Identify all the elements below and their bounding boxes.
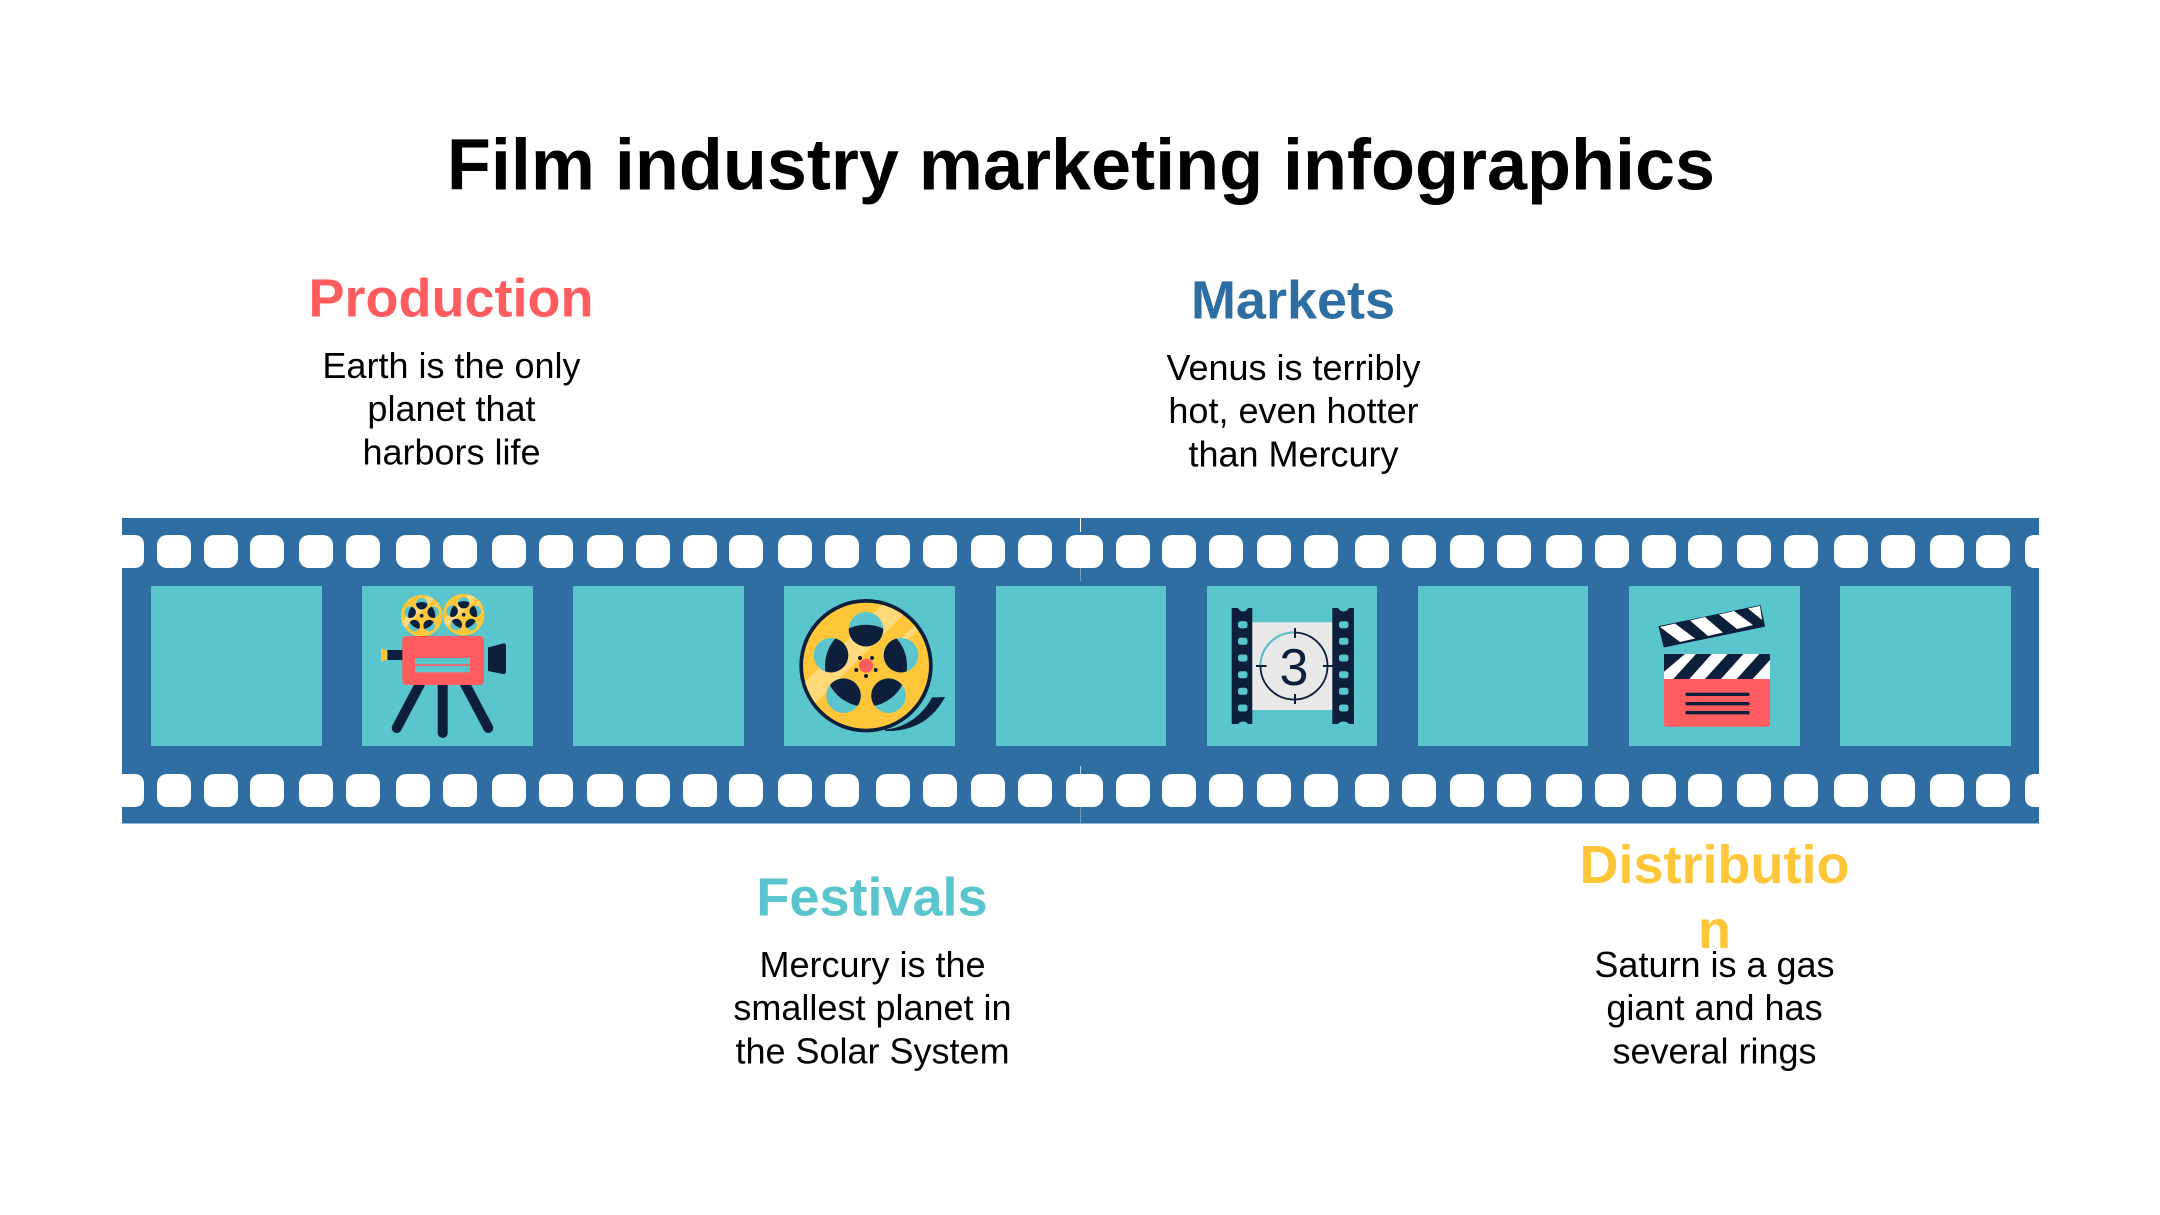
projector slot xyxy=(415,658,470,672)
clapper body xyxy=(1664,679,1770,727)
heading: Production: Production xyxy=(309,268,593,328)
icon: film countdown xyxy=(1232,608,1354,724)
description: Production: harbors life xyxy=(362,431,541,472)
description: Markets: Venus is terribly xyxy=(1166,347,1421,388)
clapper stripes xyxy=(1664,654,1770,679)
projector lens xyxy=(381,643,506,674)
description: Festivals: Mercury is the xyxy=(759,944,986,985)
clapper arm xyxy=(1659,606,1764,647)
icon: clapperboard xyxy=(1659,606,1770,727)
description: Distribution: giant and has xyxy=(1606,987,1823,1028)
sprocket holes: top row xyxy=(122,535,2039,568)
film tail xyxy=(885,697,945,731)
projector reels xyxy=(392,577,490,641)
reel xyxy=(776,551,946,742)
projector body xyxy=(402,636,484,685)
description: Production: Earth is the only xyxy=(322,345,581,386)
icon: movie projector xyxy=(381,577,506,733)
countdown dial xyxy=(1256,628,1334,704)
description: Production: planet that xyxy=(367,388,536,429)
projector legs xyxy=(397,684,488,733)
description: Festivals: smallest planet in xyxy=(733,987,1012,1028)
description: Festivals: the Solar System xyxy=(735,1030,1010,1071)
text block: Production xyxy=(309,268,593,472)
film strip xyxy=(122,518,2039,824)
description: Distribution: Saturn is a gas xyxy=(1594,944,1835,985)
heading: Distribution: Distributio xyxy=(1580,835,1849,895)
text block: Distribution xyxy=(1580,835,1849,1071)
countdown number: 3 xyxy=(1280,639,1308,697)
clapper lines xyxy=(1687,694,1748,713)
text block: Festivals xyxy=(733,868,1012,1071)
heading: Festivals: Festivals xyxy=(756,868,988,928)
heading: Markets: Markets xyxy=(1191,270,1395,330)
heading: Distribution: n xyxy=(1698,900,1731,960)
icon: film reel xyxy=(776,551,946,742)
description: Markets: hot, even hotter xyxy=(1168,390,1419,431)
description: Distribution: several rings xyxy=(1612,1030,1817,1071)
description: Markets: than Mercury xyxy=(1188,433,1399,474)
sprocket holes: bottom row xyxy=(122,774,2039,807)
title: Film industry marketing infographics xyxy=(447,126,1715,206)
film perforated strips xyxy=(1232,608,1354,724)
countdown panel xyxy=(1252,622,1333,710)
film frames xyxy=(151,586,2011,746)
text block: Markets xyxy=(1166,270,1421,474)
